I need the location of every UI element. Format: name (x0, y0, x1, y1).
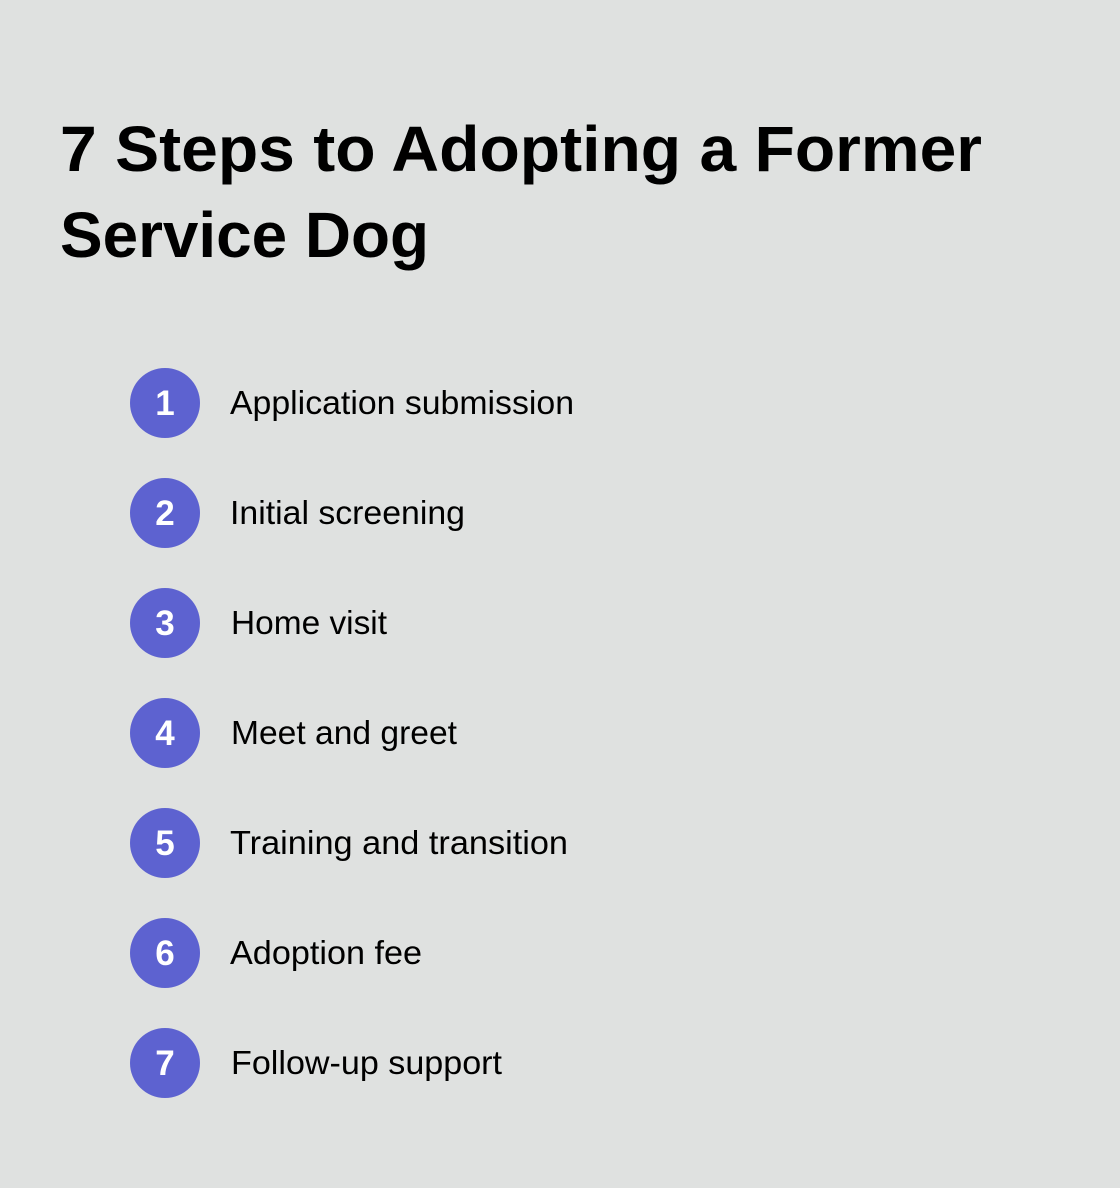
step 3: 3 (155, 604, 175, 643)
step 5: 5 (155, 824, 175, 863)
step 4 (130, 698, 457, 768)
step 5: Training and transition (230, 824, 568, 861)
title: Service Dog (60, 199, 429, 271)
step 6: 6 (155, 934, 175, 973)
title: 7 Steps to Adopting a Former (60, 113, 982, 185)
step 7: Follow-up support (231, 1044, 502, 1081)
step 2 (130, 478, 465, 548)
step 3: Home visit (231, 604, 387, 641)
step 7: 7 (155, 1044, 175, 1083)
step 5 (130, 808, 568, 878)
step 1: Application submission (230, 384, 574, 421)
step 6 (130, 918, 422, 988)
step 4: Meet and greet (231, 714, 457, 751)
step 1 (130, 368, 574, 438)
title (60, 113, 982, 271)
step 7 (130, 1028, 502, 1098)
step 2: 2 (155, 494, 175, 533)
step 3 (130, 588, 387, 658)
step 1: 1 (155, 384, 175, 423)
step 2: Initial screening (230, 494, 465, 531)
step 6: Adoption fee (230, 934, 422, 971)
step 4: 4 (155, 714, 175, 753)
